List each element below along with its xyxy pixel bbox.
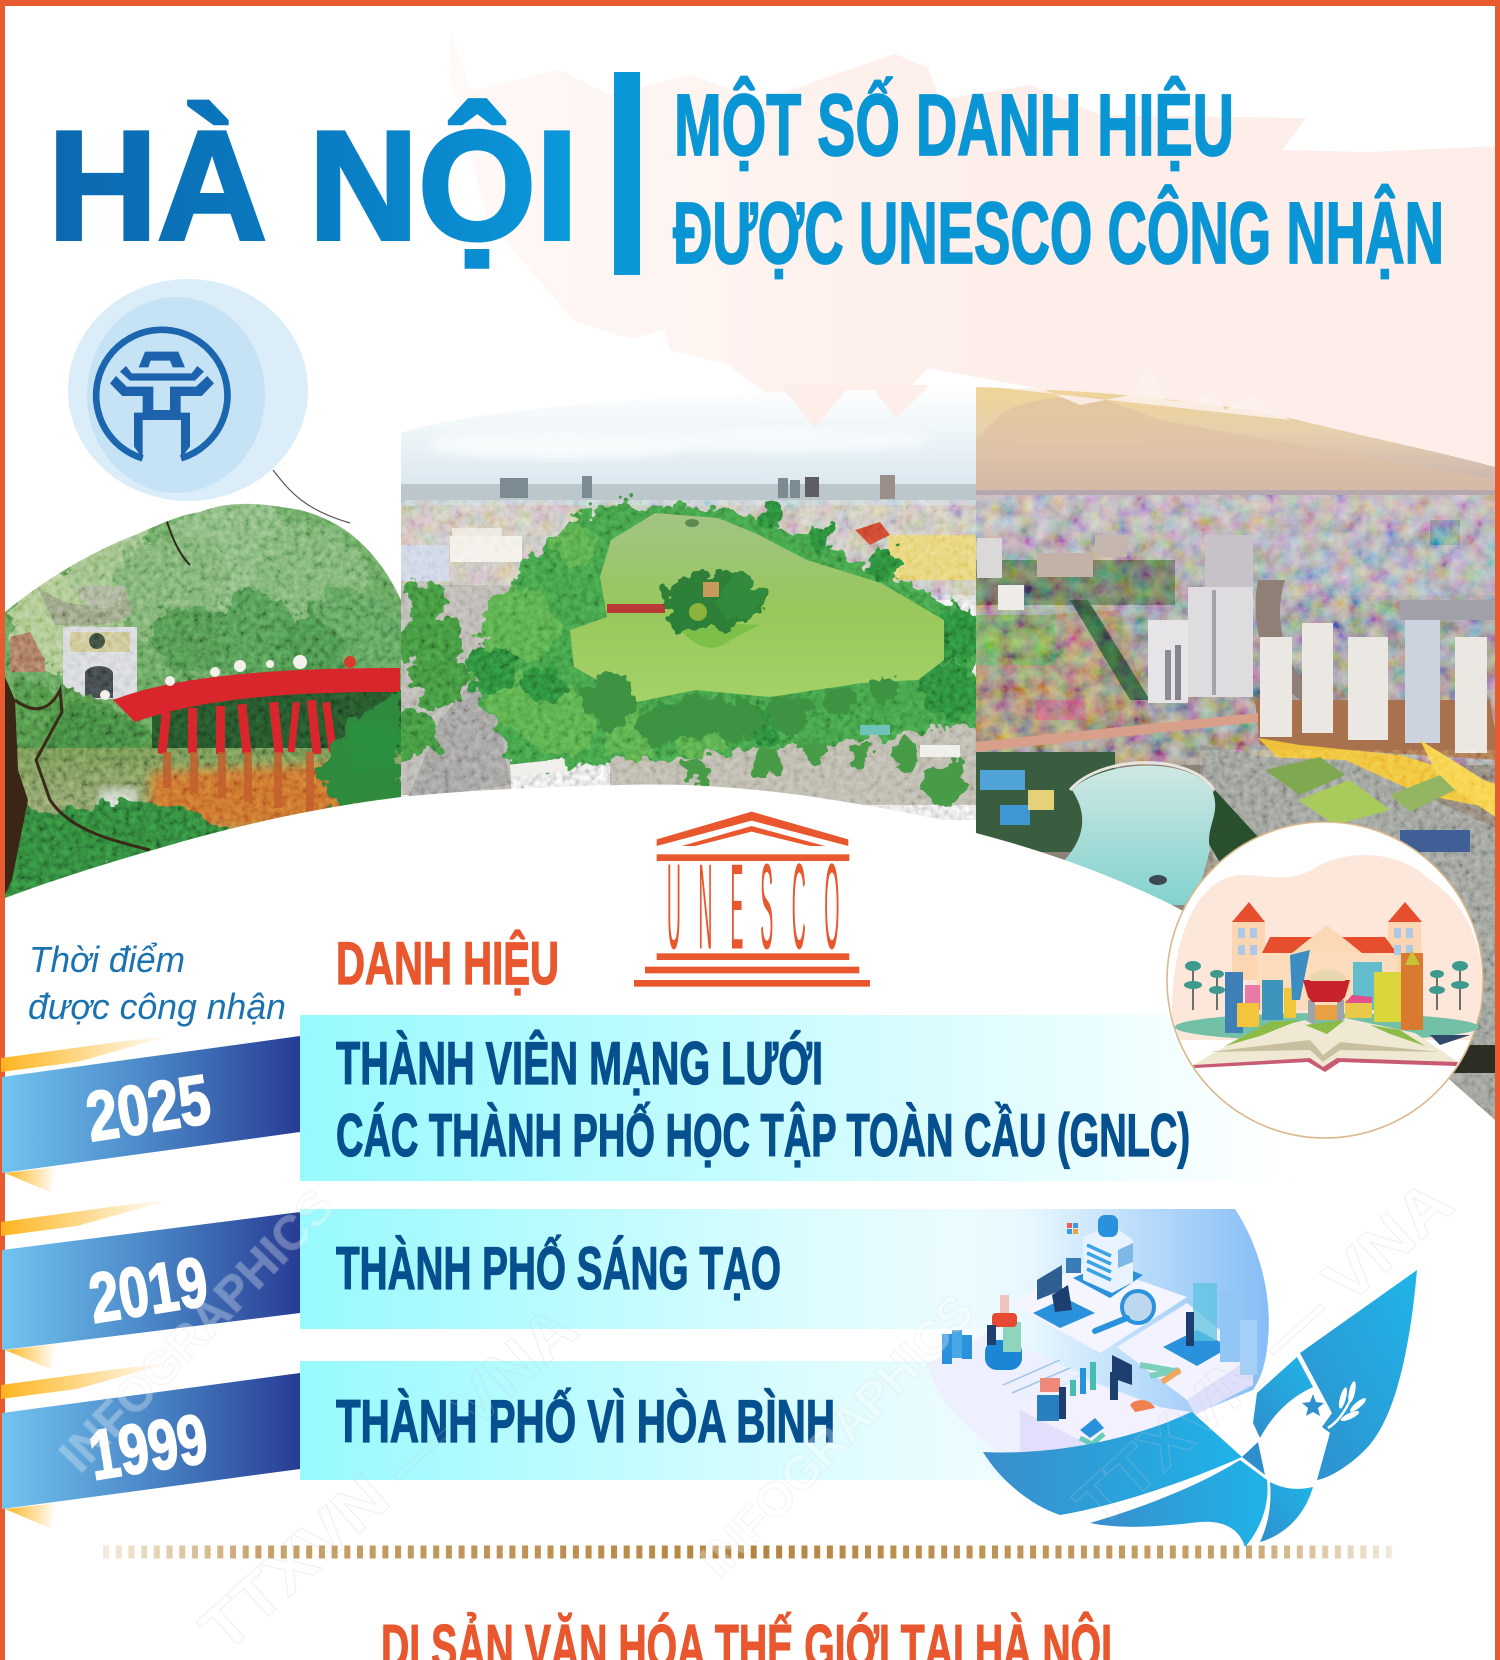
row titles: THÀNH PHỐ VÌ HÒA BÌNH bbox=[336, 1388, 835, 1455]
column label: recognition time bbox=[28, 939, 286, 1027]
year ribbon 1999 bbox=[1, 1363, 300, 1528]
background pink map shape bbox=[450, 30, 1500, 480]
UNESCO logo: C bbox=[792, 838, 806, 975]
row 1999 band bbox=[300, 1361, 1020, 1480]
UNESCO logo bbox=[634, 812, 870, 987]
title divider bar bbox=[614, 72, 640, 275]
year ribbon 2019 bbox=[1, 1200, 300, 1369]
photo: The Huc bridge and Ngoc Son temple bbox=[5, 504, 401, 898]
watermarks bbox=[50, 1166, 1466, 1660]
year ribbon 2019: 2019 bbox=[84, 1242, 213, 1338]
column label: recognition time: được công nhận bbox=[28, 986, 286, 1027]
UNESCO logo: S bbox=[760, 838, 773, 975]
twig branch bbox=[273, 470, 350, 523]
subtitle: MỘT SỐ DANH HIỆU bbox=[674, 77, 1234, 174]
watermarks: INFOGRAPHICS bbox=[690, 1285, 985, 1588]
year ribbon 2025: 2025 bbox=[81, 1060, 216, 1156]
photo: modern Hanoi skyline bbox=[975, 385, 1500, 1140]
row 2025 band bbox=[300, 1015, 1290, 1181]
watermarks: TTXVN — VNA bbox=[1061, 1166, 1466, 1540]
year ribbon 2025 bbox=[1, 1036, 300, 1192]
column label: recognition time: Thời điểm bbox=[29, 939, 185, 980]
subtitle bbox=[673, 77, 1444, 282]
photo: Hoan Kiem lake aerial bbox=[391, 385, 986, 820]
row titles: THÀNH VIÊN MẠNG LƯỚI bbox=[336, 1030, 823, 1097]
row titles bbox=[336, 1030, 1190, 1455]
UNESCO logo: E bbox=[730, 838, 743, 975]
row 2019 band bbox=[300, 1209, 1020, 1329]
UNESCO logo: U bbox=[667, 838, 681, 975]
column label: title: DANH HIỆU bbox=[336, 930, 559, 997]
illustration: smart city isometric bbox=[925, 1209, 1269, 1480]
illustration: peace dove bbox=[983, 1270, 1417, 1547]
pink peaks over sky bbox=[780, 385, 930, 428]
title: Hà Nội: HÀ NỘI bbox=[48, 99, 578, 272]
Hanoi city logo bbox=[68, 279, 308, 501]
year ribbon 1999: 1999 bbox=[84, 1399, 213, 1495]
UNESCO logo: O bbox=[824, 838, 839, 975]
UNESCO logo: N bbox=[698, 838, 712, 975]
watermarks: INFOGRAPHICS bbox=[50, 1180, 345, 1483]
row titles: THÀNH PHỐ SÁNG TẠO bbox=[336, 1235, 781, 1302]
book city illustration circle bbox=[1167, 822, 1483, 1138]
watermarks: TTXVN — VNA bbox=[186, 1291, 591, 1660]
